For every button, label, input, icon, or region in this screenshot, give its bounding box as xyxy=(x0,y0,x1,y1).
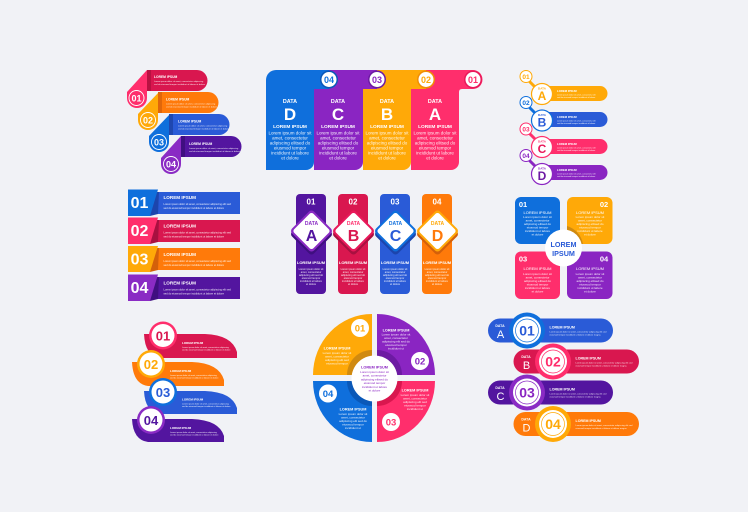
quadrant 03: amet, consectetur xyxy=(403,396,427,400)
tile 01: adipiscing elitsed do xyxy=(524,222,551,226)
column A: et dolore xyxy=(426,156,444,160)
banner 02: LOREM IPSUM xyxy=(164,224,196,228)
quadrant 04 xyxy=(313,381,372,442)
ribbon 04: Lorem ipsum dolor sit amet, consectetur adipiscing xyxy=(189,147,239,150)
panel: folded ribbons 01-04 xyxy=(127,70,242,174)
card D: 04 xyxy=(433,198,442,206)
quadrant 04: LOREM IPSUM xyxy=(340,408,366,412)
column D: 04 xyxy=(324,75,334,85)
panel: circular four-quadrant chart xyxy=(313,314,435,442)
tile 04: adipiscing elitsed do xyxy=(576,279,604,283)
column D: Lorem ipsum dolor sit xyxy=(268,130,312,136)
banner 02 xyxy=(128,218,240,244)
centre text circle: et dolore xyxy=(369,388,381,392)
capsule C 03: Lorem ipsum dolor sit amet, consectetur adipiscing elit sed xyxy=(550,392,607,396)
tile 01: 01 xyxy=(519,200,527,209)
item B: DATA xyxy=(538,113,547,117)
capsule B 02: 02 xyxy=(545,354,561,370)
card C: 03 xyxy=(391,198,400,206)
column A: 01 xyxy=(468,75,478,85)
card C: incididunt ut labore xyxy=(384,279,406,283)
card C: LOREM IPSUM xyxy=(381,260,410,265)
card A: DATA xyxy=(305,221,318,227)
banner 01: sed do eiusmod tempor incididunt ut labore et dolore xyxy=(164,206,224,210)
item D: sed do eiusmod tempor incididunt ut labore xyxy=(557,175,596,178)
item D: D xyxy=(538,169,547,183)
column D xyxy=(266,70,338,170)
column A: incididunt ut labore xyxy=(416,150,454,156)
quadrant 03 xyxy=(377,381,435,442)
quadrant 02: 02 xyxy=(415,356,425,368)
centre text circle: adipiscing elitsed do xyxy=(361,377,388,381)
curved banner 04: sed do eiusmod tempor incididunt ut labore et dolore xyxy=(170,434,219,436)
ribbon 02: sed do eiusmod tempor incididunt ut labore et dolore xyxy=(166,106,218,108)
tile 03: incididunt ut labore xyxy=(525,286,550,290)
item A xyxy=(520,70,608,104)
banner 03 xyxy=(128,246,240,272)
quadrant 03: incididunt ut xyxy=(407,407,423,411)
item A: A xyxy=(538,89,547,103)
banner 03: sed do eiusmod tempor incididunt ut labore et dolore xyxy=(164,263,224,267)
item C: 03 xyxy=(522,126,530,134)
banner 03: Lorem ipsum dolor sit amet, consectetur adipiscing elit sed xyxy=(164,259,231,263)
curved banner 02 xyxy=(132,350,224,386)
tile 03: LOREM IPSUM xyxy=(523,266,552,271)
item C: Lorem ipsum dolor sit amet, consectetur elit xyxy=(557,146,596,150)
capsule D 04: 04 xyxy=(545,416,561,432)
card A: Lorem ipsum dolor sit xyxy=(299,267,324,271)
column B: 02 xyxy=(421,75,431,85)
column B: eiusmod tempor xyxy=(371,146,404,150)
banner 02: sed do eiusmod tempor incididunt ut labore et dolore xyxy=(164,234,224,238)
tile 02: Lorem ipsum dolor sit xyxy=(576,215,604,219)
capsule D 04: DATA xyxy=(521,418,531,422)
tile 02: amet, consectetur xyxy=(578,218,602,222)
capsule A 01: DATA xyxy=(495,324,505,328)
quadrant 02: eiusmod tempor xyxy=(385,343,407,347)
capsule D 04 xyxy=(514,406,639,442)
curved banner 01: 01 xyxy=(156,328,170,344)
column A: Lorem ipsum dolor sit xyxy=(413,130,457,136)
card A: eiusmod tempor xyxy=(302,276,320,280)
curved banner 01: sed do eiusmod tempor incididunt ut labore et dolore xyxy=(182,348,231,352)
tile 02: adipiscing elitsed do xyxy=(576,222,604,226)
curved banner 01: LOREM IPSUM xyxy=(182,341,204,345)
quadrant 02: amet, consectetur xyxy=(384,336,408,340)
item D: LOREM IPSUM xyxy=(557,168,577,172)
banner 04: LOREM IPSUM xyxy=(164,280,196,286)
ribbon 01 xyxy=(127,70,208,108)
centre text circle: amet, consectetur xyxy=(363,374,386,378)
curved banner 02: sed do eiusmod tempor incididunt ut labore et dolore xyxy=(170,376,219,380)
card D: adipiscing elit sed do xyxy=(425,273,450,277)
card B: adipiscing elit sed do xyxy=(341,273,366,277)
banner 01 xyxy=(128,190,240,216)
card D: incididunt ut labore xyxy=(426,279,448,283)
panel: numbered banners 01-04 xyxy=(128,190,240,301)
tile 04 xyxy=(567,252,612,299)
card C: DATA xyxy=(389,221,402,227)
curved banner 02: LOREM IPSUM xyxy=(170,369,192,373)
item B xyxy=(520,96,608,131)
quadrant 01: Lorem ipsum dolor sit xyxy=(323,351,352,355)
item A: DATA xyxy=(538,86,547,90)
column A: adipiscing elitsed do xyxy=(415,140,456,146)
centre circle: LOREM xyxy=(551,240,576,249)
column B: incididunt ut labore xyxy=(368,150,406,156)
tile 01: amet, consectetur xyxy=(526,218,549,222)
tile 02: LOREM IPSUM xyxy=(576,210,604,215)
card B: B xyxy=(348,228,359,245)
centre text circle xyxy=(352,356,398,402)
ribbon 03 xyxy=(149,114,230,152)
curved banner 03: LOREM IPSUM xyxy=(182,398,204,402)
curved banner 04: Lorem ipsum dolor sit amet, consectetur adipiscing xyxy=(170,431,218,434)
column B: et dolore xyxy=(378,156,396,160)
capsule B 02: Lorem ipsum dolor sit amet, consectetur adipiscing elit sed xyxy=(576,362,633,364)
banner 02: Lorem ipsum dolor sit amet, consectetur adipiscing elit sed xyxy=(164,230,231,234)
tile 04: Lorem ipsum dolor sit xyxy=(576,272,604,276)
banner 03: 03 xyxy=(131,252,148,268)
column C: Lorem ipsum dolor sit xyxy=(316,130,360,136)
banner 03: LOREM IPSUM xyxy=(164,252,196,257)
quadrant 04: 04 xyxy=(323,389,334,400)
card C: et dolore xyxy=(390,282,401,286)
capsule C 03: LOREM IPSUM xyxy=(550,388,575,392)
quadrant 01 xyxy=(313,314,372,375)
quadrant 01: eiusmod tempor xyxy=(326,362,348,366)
tile 04: incididunt ut labore xyxy=(577,286,603,290)
column A: DATA xyxy=(428,99,442,105)
card B: DATA xyxy=(347,221,360,227)
quadrant 03: adipiscing elit sed xyxy=(403,400,427,404)
column D: adipiscing elitsed do xyxy=(270,140,311,146)
tile 03: Lorem ipsum dolor sit xyxy=(523,272,552,276)
card B: incididunt ut labore xyxy=(342,279,364,283)
column C: LOREM IPSUM xyxy=(321,124,355,130)
column A: eiusmod tempor xyxy=(419,146,452,150)
tile 04: eiusmod tempor xyxy=(579,282,601,286)
card B: Lorem ipsum dolor sit xyxy=(341,267,366,271)
column C xyxy=(314,70,386,170)
ribbon 04 xyxy=(161,136,242,174)
tile 04: amet, consectetur xyxy=(578,276,602,280)
capsule A 01 xyxy=(488,312,613,348)
card D: LOREM IPSUM xyxy=(423,260,452,265)
capsule B 02: B xyxy=(523,360,530,372)
card A: incididunt ut labore xyxy=(300,279,322,283)
centre circle: IPSUM xyxy=(552,249,575,258)
capsule A 01: Lorem ipsum dolor sit amet, consectetur adipiscing elit sed xyxy=(550,330,607,334)
tile 02: 02 xyxy=(600,200,608,209)
centre text circle: eiusmod tempor xyxy=(364,381,385,385)
ribbon 03: 03 xyxy=(154,138,164,148)
card B: amet, consectetur xyxy=(343,270,363,274)
item A: 01 xyxy=(522,74,530,81)
panel: curved banners with circles 01-04 xyxy=(132,322,237,442)
capsule C 03: 03 xyxy=(519,384,535,400)
tile 01: Lorem ipsum dolor sit xyxy=(523,215,552,219)
capsule C 03 xyxy=(488,374,613,410)
capsule B 02: eiusmod tempor incididunt ut labore et dolore magna xyxy=(576,364,627,368)
capsule B 02: LOREM IPSUM xyxy=(576,356,601,360)
banner 04: sed do eiusmod tempor incididunt ut labore et dolore xyxy=(164,292,224,296)
item C xyxy=(520,123,608,158)
curved banner 03: sed do eiusmod tempor incididunt ut labore et dolore xyxy=(182,405,231,408)
card D: DATA xyxy=(431,221,444,227)
panel: diamond cards A-D xyxy=(290,194,459,294)
item C: DATA xyxy=(538,140,547,144)
quadrant 02: Lorem ipsum dolor sit xyxy=(382,332,410,336)
curved banner 03: Lorem ipsum dolor sit amet, consectetur adipiscing xyxy=(182,402,230,406)
item B: 02 xyxy=(522,100,530,107)
card A: et dolore xyxy=(306,282,317,286)
card D: et dolore xyxy=(432,282,443,286)
card A: adipiscing elit sed do xyxy=(299,273,324,277)
item C: LOREM IPSUM xyxy=(557,142,577,146)
centre text circle: Lorem ipsum dolor sit xyxy=(360,370,389,374)
item D: Lorem ipsum dolor sit amet, consectetur elit xyxy=(557,172,596,176)
ribbon 03: LOREM IPSUM xyxy=(178,120,202,124)
tile 04: 04 xyxy=(600,254,609,264)
quadrant 02: incididunt ut xyxy=(388,346,404,350)
card A: amet, consectetur xyxy=(301,270,321,274)
card C xyxy=(374,194,417,294)
tile 03: amet, consectetur xyxy=(526,276,549,280)
card A xyxy=(290,194,333,294)
column C: eiusmod tempor xyxy=(322,146,355,150)
item B: B xyxy=(538,116,547,130)
column C: 03 xyxy=(372,75,382,85)
ribbon 02 xyxy=(138,92,218,130)
column D: DATA xyxy=(283,99,297,105)
card A: LOREM IPSUM xyxy=(297,260,326,265)
item C: C xyxy=(538,142,547,156)
item A: sed do eiusmod tempor incididunt ut labore xyxy=(557,96,596,99)
ribbon 04: sed do eiusmod tempor incididunt ut labore et dolore xyxy=(189,150,241,153)
centre text circle: incididunt ut labore xyxy=(362,385,387,389)
curved banner 01: Lorem ipsum dolor sit amet, consectetur adipiscing xyxy=(182,346,230,349)
quadrant 01: LOREM IPSUM xyxy=(324,346,350,350)
tile 02: et dolore xyxy=(584,232,596,236)
capsule D 04: D xyxy=(523,422,531,434)
capsule B 02 xyxy=(514,344,639,380)
curved banner 01 xyxy=(144,322,237,358)
quadrant 03: eiusmod tempor xyxy=(404,404,426,408)
capsule C 03: DATA xyxy=(495,386,505,390)
tile 03: adipiscing elitsed do xyxy=(524,279,551,283)
banner 04 xyxy=(128,274,240,301)
capsule A 01: eiusmod tempor incididunt ut labore et dolore magna xyxy=(550,334,601,336)
curved banner 02: 02 xyxy=(144,357,158,372)
quadrant 04: amet, consectetur xyxy=(341,416,365,420)
column C: adipiscing elitsed do xyxy=(318,140,359,146)
card B: LOREM IPSUM xyxy=(339,260,368,265)
column C: incididunt ut labore xyxy=(319,150,357,156)
column B: B xyxy=(381,105,393,124)
capsule D 04: eiusmod tempor incididunt ut labore et dolore magna xyxy=(576,427,627,430)
card D: eiusmod tempor xyxy=(428,276,446,280)
column B: LOREM IPSUM xyxy=(370,124,404,130)
item B: sed do eiusmod tempor incididunt ut labore xyxy=(557,122,596,125)
card B xyxy=(332,194,375,294)
ribbon 01: Lorem ipsum dolor sit amet, consectetur adipiscing xyxy=(154,80,204,83)
item B: LOREM IPSUM xyxy=(557,115,577,119)
capsule D 04: LOREM IPSUM xyxy=(576,419,601,423)
column B: adipiscing elitsed do xyxy=(367,140,408,146)
item D xyxy=(520,150,608,184)
column C: C xyxy=(332,105,344,124)
curved banner 04: 04 xyxy=(144,413,159,428)
column C: et dolore xyxy=(329,156,347,160)
centre text circle: LOREM IPSUM xyxy=(361,366,388,370)
capsule A 01: LOREM IPSUM xyxy=(550,326,575,330)
column B: Lorem ipsum dolor sit xyxy=(365,130,409,136)
tile 03: eiusmod tempor xyxy=(527,282,548,286)
tile 01: eiusmod tempor xyxy=(527,226,548,230)
banner 01: Lorem ipsum dolor sit amet, consectetur adipiscing elit sed xyxy=(164,202,231,206)
quadrant 04: Lorem ipsum dolor sit xyxy=(339,412,368,416)
column D: D xyxy=(284,105,296,124)
ribbon 01: 01 xyxy=(131,94,142,104)
column C: DATA xyxy=(331,99,345,105)
column B xyxy=(363,70,435,170)
panel: connected circles A-D xyxy=(520,70,608,184)
card D: Lorem ipsum dolor sit xyxy=(425,267,450,271)
capsule C 03: C xyxy=(497,391,505,403)
card C: C xyxy=(390,228,402,245)
card C: adipiscing elit sed do xyxy=(383,273,408,277)
ribbon 03: sed do eiusmod tempor incididunt ut labore et dolore xyxy=(178,128,230,130)
tile 02: eiusmod tempor xyxy=(579,226,601,230)
banner 01: 01 xyxy=(131,195,148,212)
card C: eiusmod tempor xyxy=(386,276,404,280)
item B: Lorem ipsum dolor sit amet, consectetur elit xyxy=(557,120,596,122)
item C: sed do eiusmod tempor incididunt ut labore xyxy=(557,149,596,152)
column D: incididunt ut labore xyxy=(271,150,309,156)
quadrant 04: eiusmod tempor xyxy=(342,422,364,426)
card C: Lorem ipsum dolor sit xyxy=(383,267,408,271)
ribbon 02: Lorem ipsum dolor sit amet, consectetur adipiscing xyxy=(166,102,216,106)
item A: Lorem ipsum dolor sit amet, consectetur elit xyxy=(557,94,596,96)
quadrant 03: 03 xyxy=(386,418,396,428)
item D: 04 xyxy=(522,153,530,160)
tile 01: et dolore xyxy=(532,232,544,236)
column A xyxy=(411,70,482,170)
card A: 01 xyxy=(307,198,316,206)
capsule C 03: eiusmod tempor incididunt ut labore et dolore magna xyxy=(550,396,601,398)
curved banner 02: Lorem ipsum dolor sit amet, consectetur adipiscing xyxy=(170,374,218,377)
column B: DATA xyxy=(380,99,394,105)
quadrant 01: adipiscing elit sed xyxy=(325,358,349,362)
tile 03: 03 xyxy=(519,254,527,264)
column C: amet, consectetur xyxy=(320,136,356,140)
card C: amet, consectetur xyxy=(385,270,405,274)
card D: amet, consectetur xyxy=(427,270,447,274)
ribbon 04: LOREM IPSUM xyxy=(189,142,213,146)
tile 02: incididunt ut labore xyxy=(577,229,603,233)
centre circle xyxy=(545,230,582,266)
column D: et dolore xyxy=(281,156,299,160)
ribbon 01: LOREM IPSUM xyxy=(154,75,178,79)
ribbon 02: LOREM IPSUM xyxy=(166,98,190,102)
panel: four tiles around centre circle xyxy=(515,197,612,299)
ribbon 04: 04 xyxy=(166,160,176,170)
panel: stepped data columns D-A xyxy=(266,70,482,170)
column A: A xyxy=(429,105,441,124)
card D xyxy=(416,194,459,294)
quadrant 04: adipiscing elit sed do xyxy=(339,419,367,423)
capsule D 04: Lorem ipsum dolor sit amet, consectetur adipiscing elit sed xyxy=(576,424,633,427)
card B: et dolore xyxy=(348,282,359,286)
card A: A xyxy=(306,228,318,245)
quadrant 03: LOREM IPSUM xyxy=(402,388,428,392)
curved banner 04: LOREM IPSUM xyxy=(170,426,192,430)
curved banner 03 xyxy=(144,378,237,414)
column D: amet, consectetur xyxy=(272,136,308,140)
tile 02 xyxy=(567,197,612,244)
tile 04: LOREM IPSUM xyxy=(576,266,604,271)
quadrant 03: Lorem ipsum dolor sit xyxy=(401,393,430,397)
ribbon 01: sed do eiusmod tempor incididunt ut labore et dolore xyxy=(154,83,206,86)
ribbon 03: Lorem ipsum dolor sit amet, consectetur adipiscing xyxy=(178,124,228,128)
item D: DATA xyxy=(538,166,547,170)
curved banner 03: 03 xyxy=(156,385,170,400)
capsule B 02: DATA xyxy=(521,355,531,359)
panel: capsule bars with ringed numbers xyxy=(488,312,639,442)
tile 01 xyxy=(515,197,560,244)
card B: 02 xyxy=(349,198,358,206)
curved banner 04 xyxy=(132,406,224,442)
capsule A 01: A xyxy=(497,329,505,341)
banner 01: LOREM IPSUM xyxy=(164,195,196,200)
tile 03 xyxy=(515,252,560,299)
quadrant 02: LOREM IPSUM xyxy=(383,328,409,332)
tile 04: et dolore xyxy=(584,290,596,294)
column A: LOREM IPSUM xyxy=(418,124,452,130)
card D: D xyxy=(432,228,443,245)
quadrant 01: 01 xyxy=(355,324,366,334)
item A: LOREM IPSUM xyxy=(557,89,577,93)
column A: amet, consectetur xyxy=(417,136,453,140)
banner 04: 04 xyxy=(131,280,148,297)
tile 03: et dolore xyxy=(532,290,544,294)
tile 01: LOREM IPSUM xyxy=(523,210,552,215)
column D: LOREM IPSUM xyxy=(273,124,307,130)
capsule A 01: 01 xyxy=(519,322,535,338)
ribbon 02: 02 xyxy=(143,116,153,126)
quadrant 02 xyxy=(377,314,435,375)
column B: amet, consectetur xyxy=(369,136,405,140)
banner 04: Lorem ipsum dolor sit amet, consectetur adipiscing elit sed xyxy=(164,288,231,292)
quadrant 01: amet, consectetur xyxy=(325,354,349,358)
quadrant 02: adipiscing elit sed do xyxy=(382,340,410,344)
tile 01: incididunt ut labore xyxy=(525,229,550,233)
column D: eiusmod tempor xyxy=(274,146,307,150)
banner 02: 02 xyxy=(131,223,148,240)
card B: eiusmod tempor xyxy=(344,276,362,280)
quadrant 04: incididunt ut xyxy=(345,426,361,430)
